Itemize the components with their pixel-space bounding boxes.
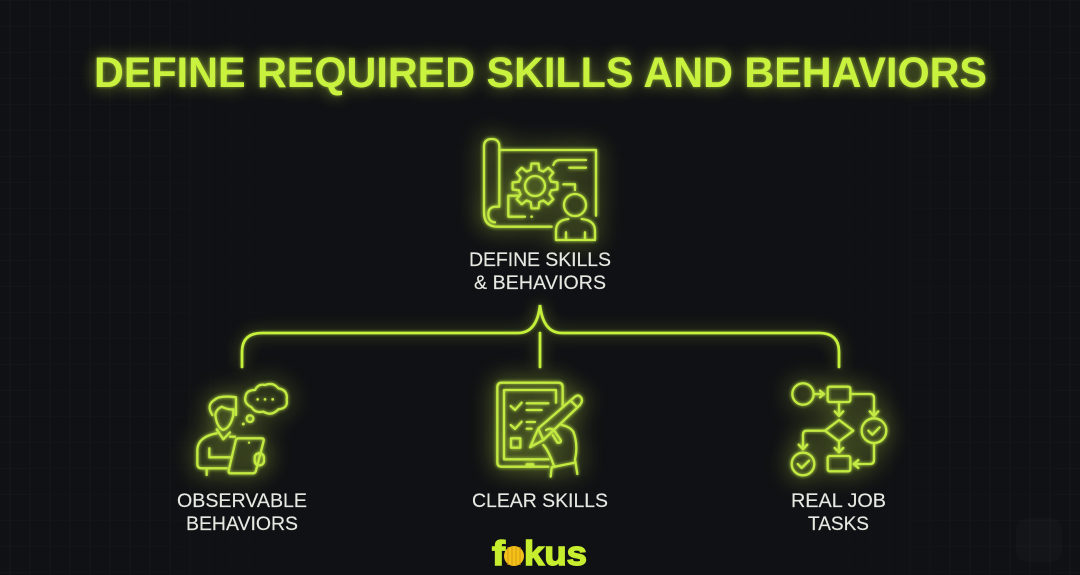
icon: person with thought bubble and tablet	[197, 384, 287, 475]
title: DEFINE REQUIRED SKILLS AND BEHAVIORS	[94, 49, 987, 97]
label: real job tasks: TASKS	[808, 513, 869, 535]
panel: clear skills	[472, 383, 608, 512]
logo: fokus: kus	[524, 535, 587, 573]
logo: fokus	[492, 535, 587, 573]
connector: branching lines	[242, 305, 839, 367]
icon: tablet checklist with hand and pen	[497, 383, 582, 477]
label: clear skills: CLEAR SKILLS	[472, 490, 608, 512]
icon: blueprint with gear and person	[484, 139, 596, 240]
label: define skills and behaviors: DEFINE SKILLS	[469, 249, 611, 271]
label: real job tasks: REAL JOB	[791, 490, 886, 512]
panel: define skills and behaviors	[469, 139, 611, 294]
label: observable behaviors: OBSERVABLE	[177, 490, 307, 512]
icon: process flowchart	[792, 383, 886, 475]
panel: observable behaviors	[177, 384, 307, 535]
logo: fokus: f	[492, 535, 506, 573]
panel: real job tasks	[791, 383, 886, 535]
label: observable behaviors: BEHAVIORS	[186, 513, 298, 535]
label: define skills and behaviors: & BEHAVIORS	[474, 272, 606, 294]
